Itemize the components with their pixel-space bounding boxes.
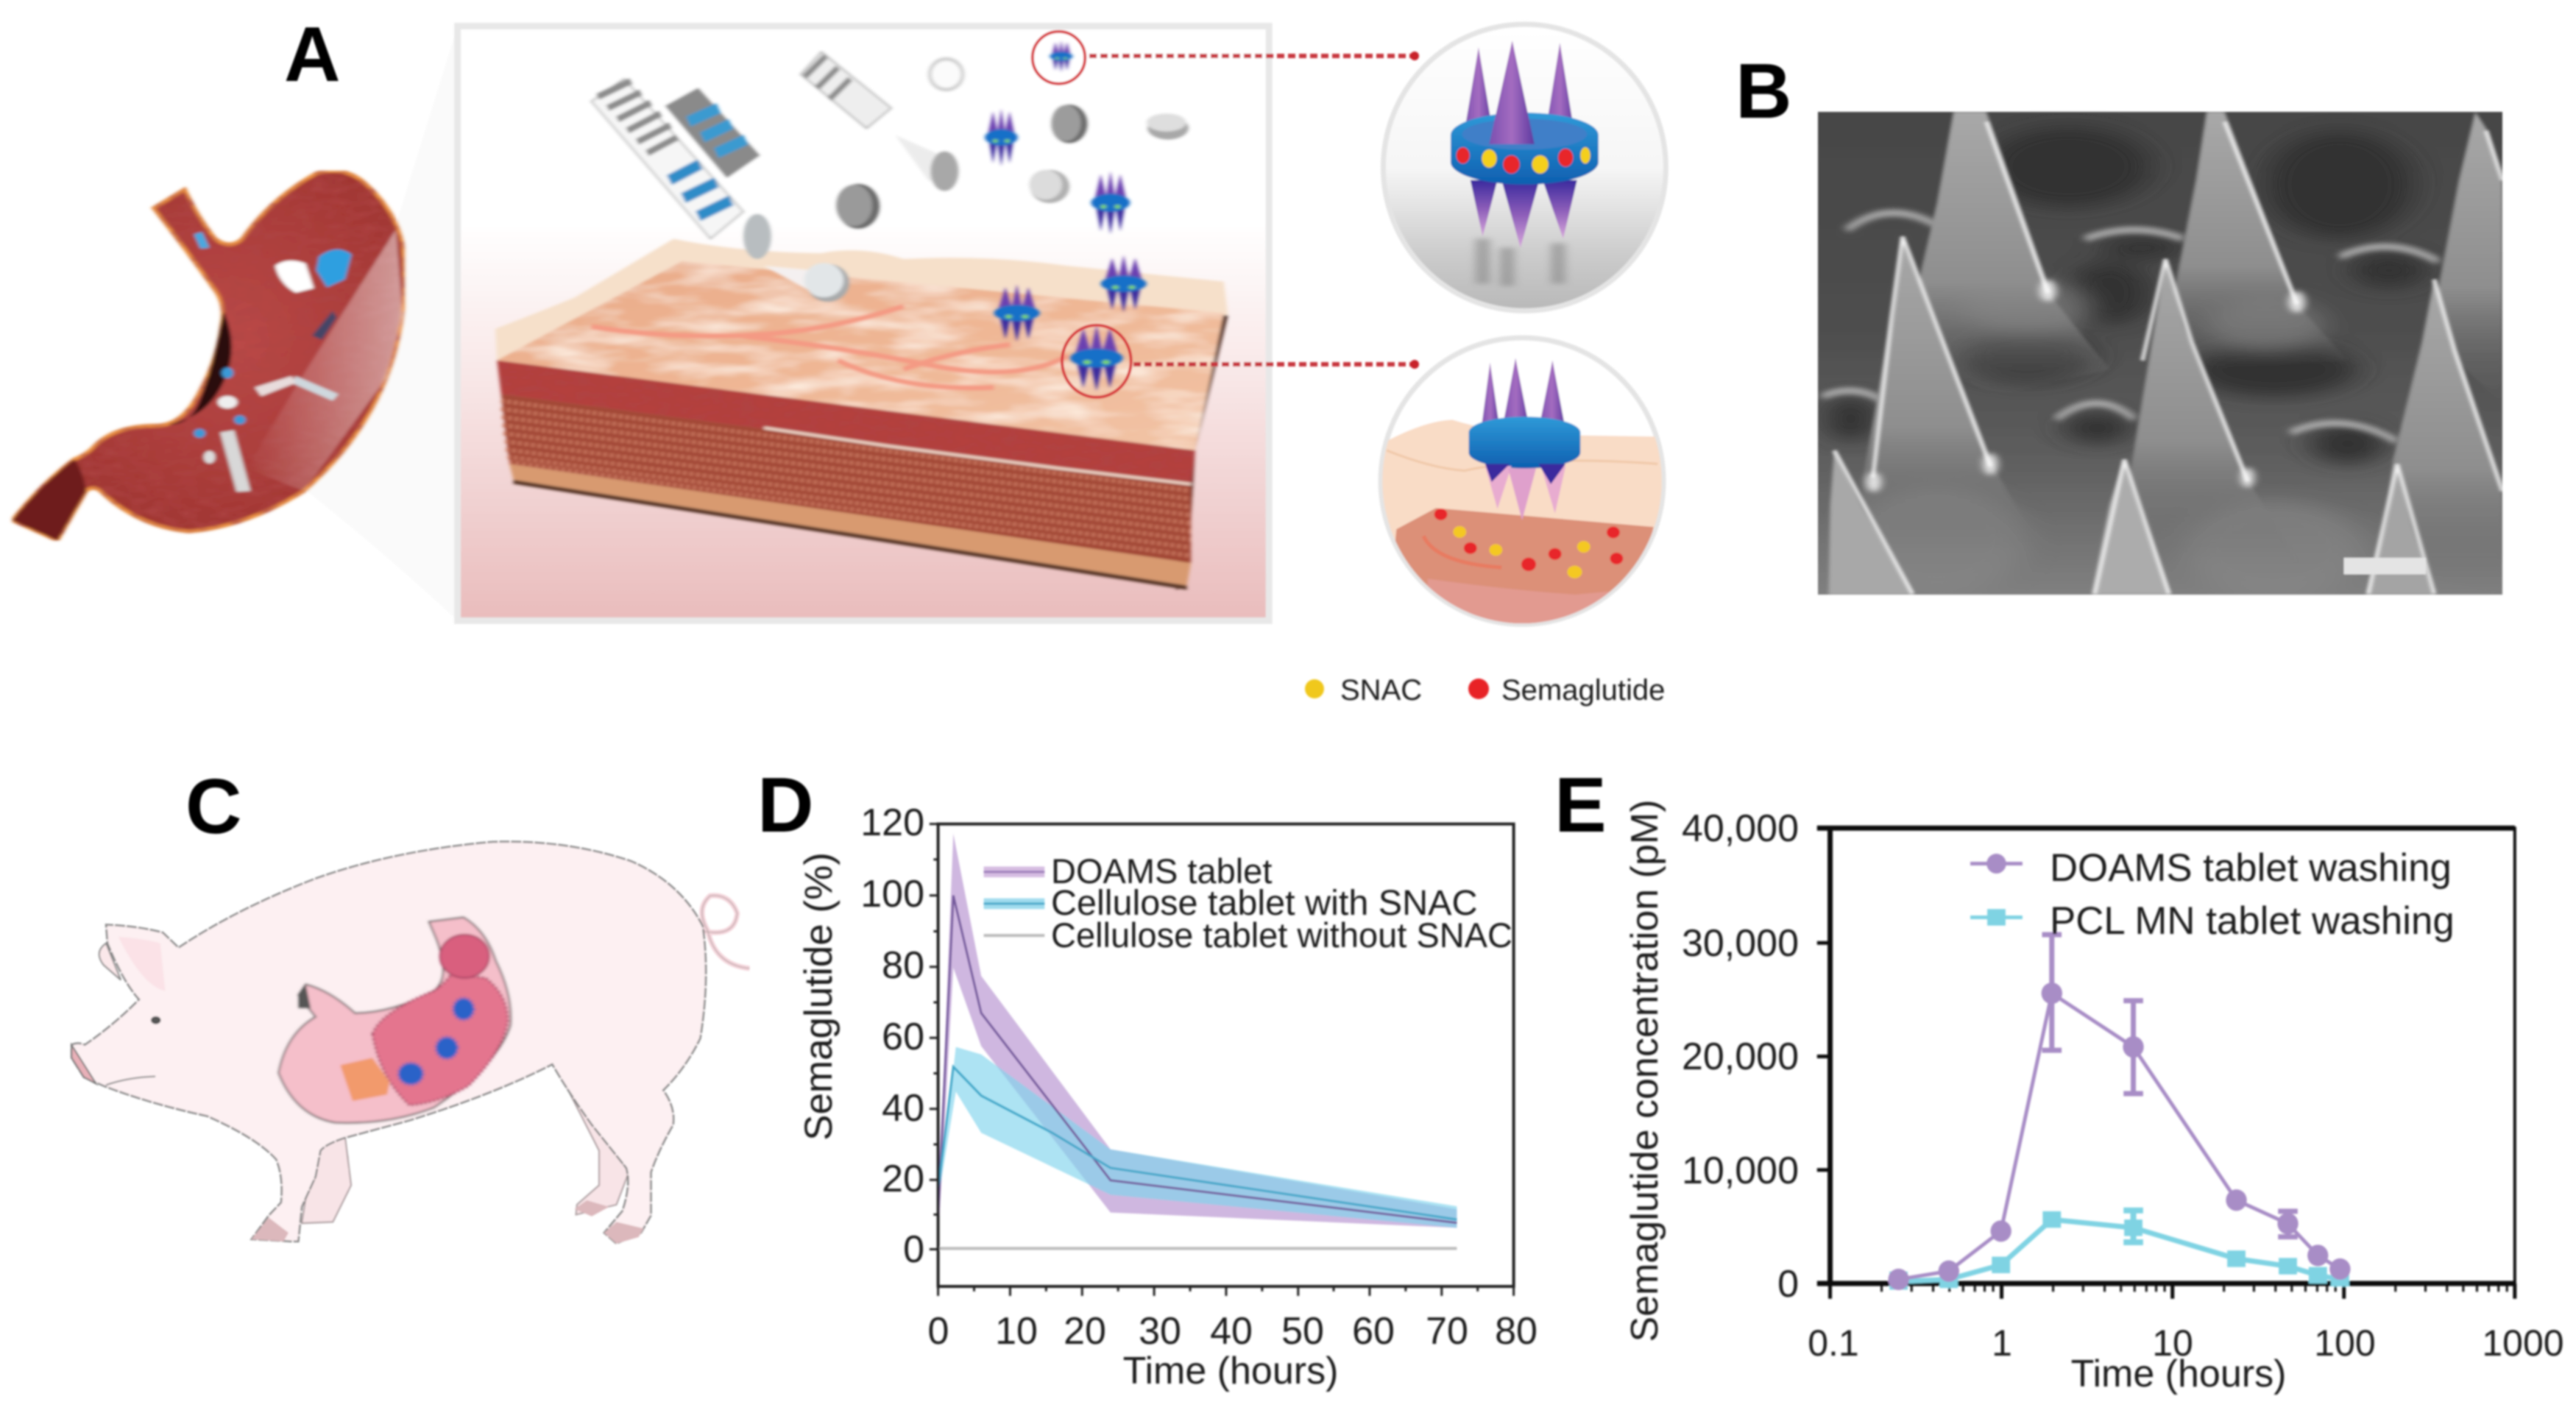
line: cellulose with SNAC xyxy=(938,1067,1457,1219)
cones xyxy=(1829,112,2502,595)
legend markers xyxy=(1970,854,2023,926)
microneedle icons falling xyxy=(985,40,1147,392)
tablets xyxy=(743,59,1189,302)
icon: stomach xyxy=(13,171,405,540)
panel: E xyxy=(1554,762,2564,1395)
legend labels xyxy=(1051,851,1512,955)
x axis title: Time (hours) xyxy=(2071,1353,2286,1395)
x tick labels: 100 xyxy=(2314,1322,2376,1364)
x tick labels: 0 xyxy=(928,1310,949,1353)
far legs xyxy=(302,1069,629,1223)
callout circle: inserted microneedle tablet xyxy=(1370,338,1674,631)
stomach xyxy=(279,918,511,1123)
capsules xyxy=(592,52,891,238)
y tick labels: 20,000 xyxy=(1682,1035,1799,1078)
x tick labels: 80 xyxy=(1495,1310,1538,1353)
legend swatches xyxy=(984,866,1044,877)
cone highlights xyxy=(1834,121,2502,594)
legend labels: PCL MN tablet washing xyxy=(2050,899,2455,943)
panel: B xyxy=(1735,48,2502,599)
y axis title: Semaglutide (%) xyxy=(797,852,841,1141)
band: cellulose with SNAC xyxy=(940,1047,1457,1228)
y tick labels: 80 xyxy=(882,944,924,987)
x tick labels: 20 xyxy=(1064,1310,1106,1353)
legend labels xyxy=(2050,846,2455,943)
y tick labels: 60 xyxy=(882,1016,924,1058)
x tick labels: 50 xyxy=(1281,1310,1324,1353)
axes frame xyxy=(1830,828,2515,1283)
x tick labels xyxy=(1808,1322,2564,1364)
y tick labels: 120 xyxy=(860,801,924,844)
legend: SNAC and Semaglutide xyxy=(1305,674,1665,706)
legend: SNAC and Semaglutide: Semaglutide xyxy=(1501,674,1665,706)
y axis title: Semaglutide concentration (pM) xyxy=(1624,799,1666,1342)
SEM micrograph of microneedles xyxy=(1816,110,2504,596)
label C: C xyxy=(185,763,242,850)
panel: A xyxy=(13,11,1674,706)
label A: A xyxy=(284,11,341,98)
eye xyxy=(151,1016,160,1024)
magnifying wedge xyxy=(304,26,458,620)
lower glow xyxy=(1847,280,2364,599)
series: DOAMS tablet washing xyxy=(1888,935,2351,1290)
callout circles xyxy=(1033,32,1131,397)
legend: SNAC and Semaglutide: SNAC xyxy=(1340,674,1422,706)
y tick labels: 10,000 xyxy=(1682,1150,1799,1192)
tissue block xyxy=(495,238,1228,590)
callout circle: dry microneedle tablet xyxy=(1383,24,1666,311)
x tick labels: 40 xyxy=(1210,1310,1253,1353)
chart: semaglutide concentration over time xyxy=(1624,799,2564,1395)
y tick labels: 40 xyxy=(882,1087,924,1130)
y tick labels xyxy=(1682,807,1799,1306)
y tick labels: 20 xyxy=(882,1158,924,1200)
body xyxy=(71,842,706,1244)
line: DOAMS tablet xyxy=(938,896,1457,1223)
scale bar xyxy=(2344,558,2426,574)
dashed callout lines xyxy=(1089,56,1413,364)
box frame xyxy=(458,26,1269,620)
y tick labels: 30,000 xyxy=(1682,922,1799,965)
x tick labels: 60 xyxy=(1352,1310,1395,1353)
label E: E xyxy=(1554,762,1607,849)
y tick labels: 40,000 xyxy=(1682,807,1799,850)
y tick labels: 0 xyxy=(903,1228,924,1271)
axes frame xyxy=(938,824,1514,1286)
y tick labels xyxy=(860,801,924,1271)
label B: B xyxy=(1735,48,1792,135)
hooves xyxy=(252,1200,643,1244)
label D: D xyxy=(757,762,814,849)
hollows xyxy=(1826,127,2426,464)
band: DOAMS tablet xyxy=(938,834,1457,1228)
bright ridges xyxy=(1822,213,2438,442)
x axis title: Time (hours) xyxy=(1123,1350,1338,1392)
x tick labels: 10 xyxy=(995,1310,1038,1353)
legend labels: DOAMS tablet xyxy=(1051,851,1272,890)
y tick labels: 0 xyxy=(1777,1263,1799,1306)
chart: semaglutide % over time xyxy=(797,801,1538,1392)
line: cellulose without SNAC xyxy=(938,1247,1457,1250)
x tick labels: 1000 xyxy=(2482,1322,2564,1364)
pig illustration xyxy=(71,842,749,1244)
ear inner xyxy=(118,937,165,991)
x tick labels: 70 xyxy=(1426,1310,1468,1353)
tablets in stomach xyxy=(399,999,473,1084)
legend labels: DOAMS tablet washing xyxy=(2050,846,2452,890)
x tick labels: 10 xyxy=(2152,1322,2193,1364)
tail xyxy=(700,896,749,968)
x tick labels: 0.1 xyxy=(1808,1322,1859,1364)
x tick labels: 30 xyxy=(1139,1310,1181,1353)
x tick labels: 1 xyxy=(1992,1322,2012,1364)
y tick labels: 100 xyxy=(860,873,924,916)
legend labels: Cellulose tablet with SNAC xyxy=(1051,883,1478,923)
snout and mouth xyxy=(71,1045,96,1084)
panel: C xyxy=(71,763,749,1244)
legend labels: Cellulose tablet without SNAC xyxy=(1051,916,1512,955)
panel: D xyxy=(757,762,1538,1392)
series: PCL MN tablet washing xyxy=(1889,1211,2349,1289)
far ear xyxy=(99,943,121,980)
x tick labels xyxy=(928,1310,1538,1353)
